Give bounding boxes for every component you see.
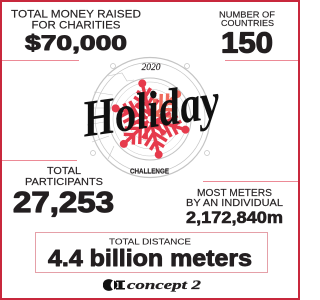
logo mark: [103, 279, 125, 291]
panel: total distance: [36, 232, 268, 272]
stat: most meters by an individual: [186, 188, 284, 227]
2020: 2020: [142, 63, 161, 73]
stat: most meters by an individual: 2,172,840m: [186, 208, 283, 227]
divider lines: [2, 60, 298, 182]
snowflake: [101, 70, 200, 168]
stat: total participants: TOTAL: [47, 166, 82, 177]
stat: total participants: [13, 166, 114, 219]
challenge: CHALLENGE: [130, 168, 169, 176]
panel: total distance: TOTAL DISTANCE: [109, 236, 191, 246]
stat: number of countries: [219, 10, 275, 60]
stat: total money raised: $70,000: [25, 32, 127, 55]
holiday script: Holiday: [78, 73, 224, 149]
stat: number of countries: 150: [221, 28, 273, 60]
stat: number of countries: COUNTRIES: [221, 18, 274, 28]
stat: total money raised: [11, 8, 141, 55]
stat: most meters by an individual: BY AN INDIVIDUAL: [186, 198, 284, 209]
stat: most meters by an individual: MOST METERS: [197, 188, 272, 199]
stat: total participants: 27,253: [13, 187, 114, 219]
emblem: holiday challenge: [78, 58, 224, 178]
stat: total money raised: FOR CHARITIES: [32, 20, 120, 32]
logo wordmark: concept 2: [127, 278, 201, 292]
emblem rings: [87, 58, 210, 178]
stat: number of countries: NUMBER OF: [219, 10, 275, 20]
panel: total distance: 4.4 billion meters: [48, 245, 252, 271]
stat: total money raised: TOTAL MONEY RAISED: [11, 8, 141, 20]
logo: concept 2: [103, 278, 201, 292]
stat: total participants: PARTICIPANTS: [25, 177, 104, 188]
